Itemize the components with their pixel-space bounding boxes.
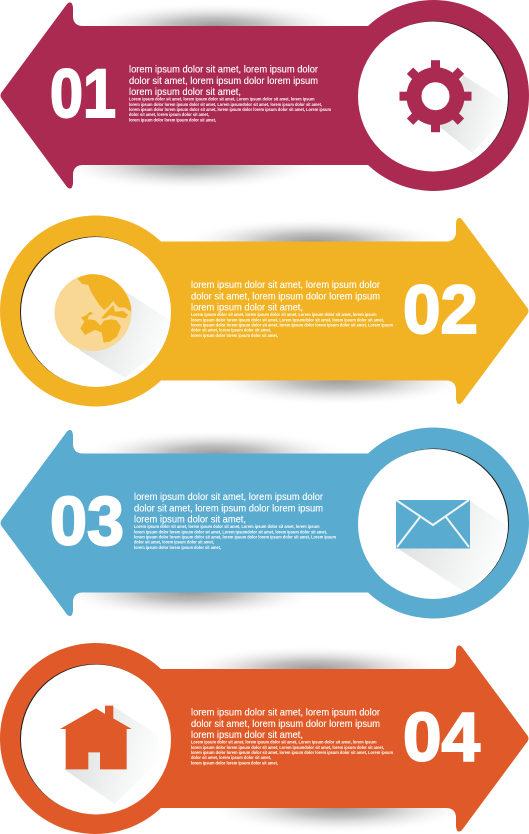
text block: lorem ipsum dolor lorem ipsum dolor sit amet,	[191, 333, 278, 338]
icon shadow	[79, 292, 172, 378]
text block: lorem ipsum dolor lorem ipsum dolor sit amet, lorem ipsum dolor lorem ipsum dolor sit amet, Lorem ipsum	[129, 107, 331, 112]
icon shadow	[440, 75, 508, 153]
text block: lorem ipsum dolor sit amet, lorem ipsum dolor	[129, 65, 319, 76]
text block: Lorem ipsum dolor sit amet, lorem ipsum dolor sit amet, Lorem ipsum dolor sit amet, lorem ipsum	[191, 312, 377, 317]
arrow band	[0, 2, 372, 189]
text block: dolor sit amet, lorem ipsum dolor lorem ipsum	[191, 719, 380, 730]
ring dark edge	[20, 664, 170, 814]
text block: lorem ipsum dolor sit amet, lorem ipsum dolor	[191, 708, 381, 719]
arrow shadows	[179, 218, 474, 406]
text block: dolor sit amet, lorem ipsum dolor sit amet,	[129, 112, 209, 117]
text block: dolor sit amet, lorem ipsum dolor sit amet,	[134, 540, 214, 544]
text block: lorem ipsum dolor lorem ipsum dolor sit amet,	[129, 118, 216, 122]
text block	[191, 708, 393, 766]
text block: dolor sit amet, lorem ipsum dolor sit amet,	[191, 328, 271, 332]
white disc	[21, 664, 171, 814]
icon: gear	[400, 60, 472, 132]
number: 02	[403, 271, 478, 348]
text block	[134, 492, 336, 550]
text block: lorem ipsum dolor lorem ipsum dolor sit amet, Lorem ipsumdolor sit amet, lorem ipsum dolor sit amet,	[191, 318, 384, 322]
text block: Lorem ipsum dolor sit amet, lorem ipsum dolor sit amet, Lorem ipsum dolor sit amet, lorem ipsum	[129, 97, 315, 102]
ring dark edge	[20, 236, 170, 386]
arrow band	[157, 645, 528, 832]
arrow shadows	[55, 2, 350, 190]
text block: Lorem ipsum dolor sit amet, lorem ipsum dolor sit amet, Lorem ipsum dolor sit amet, lorem ipsum	[191, 740, 377, 745]
ring	[338, 0, 529, 191]
text block: lorem ipsum dolor lorem ipsum dolor sit amet, Lorem ipsumdolor sit amet, lorem ipsum dolor sit amet,	[191, 745, 384, 750]
ring	[0, 216, 191, 406]
text block: lorem ipsum dolor sit amet, lorem ipsum dolor	[191, 280, 381, 291]
ring dark edge	[359, 21, 509, 171]
text block: lorem ipsum dolor lorem ipsum dolor sit amet,	[191, 760, 278, 766]
white disc	[21, 237, 171, 387]
text block: lorem ipsum dolor lorem ipsum dolor sit amet, lorem ipsum dolor lorem ipsum dolor sit amet, Lorem ipsum	[191, 750, 393, 755]
text block	[129, 65, 331, 122]
number: 04	[403, 698, 480, 776]
text block: dolor sit amet, lorem ipsum dolor lorem ipsum	[191, 292, 380, 302]
ring	[0, 643, 191, 834]
arrow shadows	[179, 646, 474, 834]
text block: dolor sit amet, lorem ipsum dolor sit amet,	[191, 755, 271, 760]
panel: step 04	[0, 643, 528, 834]
white disc	[358, 449, 508, 599]
text block: dolor sit amet, lorem ipsum dolor lorem ipsum	[129, 76, 318, 87]
arrow shadows	[55, 430, 350, 618]
ring dark edge	[359, 448, 509, 598]
icon shadow	[397, 501, 509, 592]
icon: envelope	[396, 500, 470, 548]
text block: lorem ipsum dolor sit amet, lorem ipsum dolor	[134, 492, 324, 503]
ring	[338, 428, 529, 618]
arrow band	[157, 218, 528, 404]
panel: step 01	[0, 0, 529, 191]
text block	[191, 280, 393, 338]
text block: lorem ipsum dolor sit amet,	[191, 302, 303, 314]
panel: step 03	[0, 428, 529, 618]
white disc	[358, 22, 508, 172]
number: 03	[50, 482, 124, 560]
text block: lorem ipsum dolor lorem ipsum dolor sit amet, lorem ipsum dolor lorem ipsum dolor sit amet, Lorem ipsum	[191, 322, 393, 328]
text block: lorem ipsum dolor lorem ipsum dolor sit amet, Lorem ipsumdolor sit amet, lorem ipsum dolor sit amet,	[134, 530, 327, 534]
panel: step 02	[0, 216, 528, 406]
icon: globe	[54, 274, 131, 351]
text block: dolor sit amet, lorem ipsum dolor lorem ipsum	[134, 504, 323, 514]
text block: lorem ipsum dolor lorem ipsum dolor sit amet, Lorem ipsumdolor sit amet, lorem ipsum dolor sit amet,	[129, 102, 322, 107]
text block: lorem ipsum dolor sit amet,	[191, 730, 303, 741]
text block: Lorem ipsum dolor sit amet, lorem ipsum dolor sit amet, Lorem ipsum dolor sit amet, lorem ipsum	[134, 524, 320, 529]
icon shadow	[65, 707, 146, 804]
text block: lorem ipsum dolor lorem ipsum dolor sit amet, lorem ipsum dolor lorem ipsum dolor sit amet, Lorem ipsum	[134, 534, 336, 540]
icon: house	[60, 706, 132, 769]
text block: lorem ipsum dolor lorem ipsum dolor sit amet,	[134, 545, 221, 550]
arrow band	[0, 430, 372, 616]
number: 01	[50, 55, 116, 132]
text block: lorem ipsum dolor sit amet,	[134, 514, 246, 526]
text block: lorem ipsum dolor sit amet,	[129, 87, 241, 98]
